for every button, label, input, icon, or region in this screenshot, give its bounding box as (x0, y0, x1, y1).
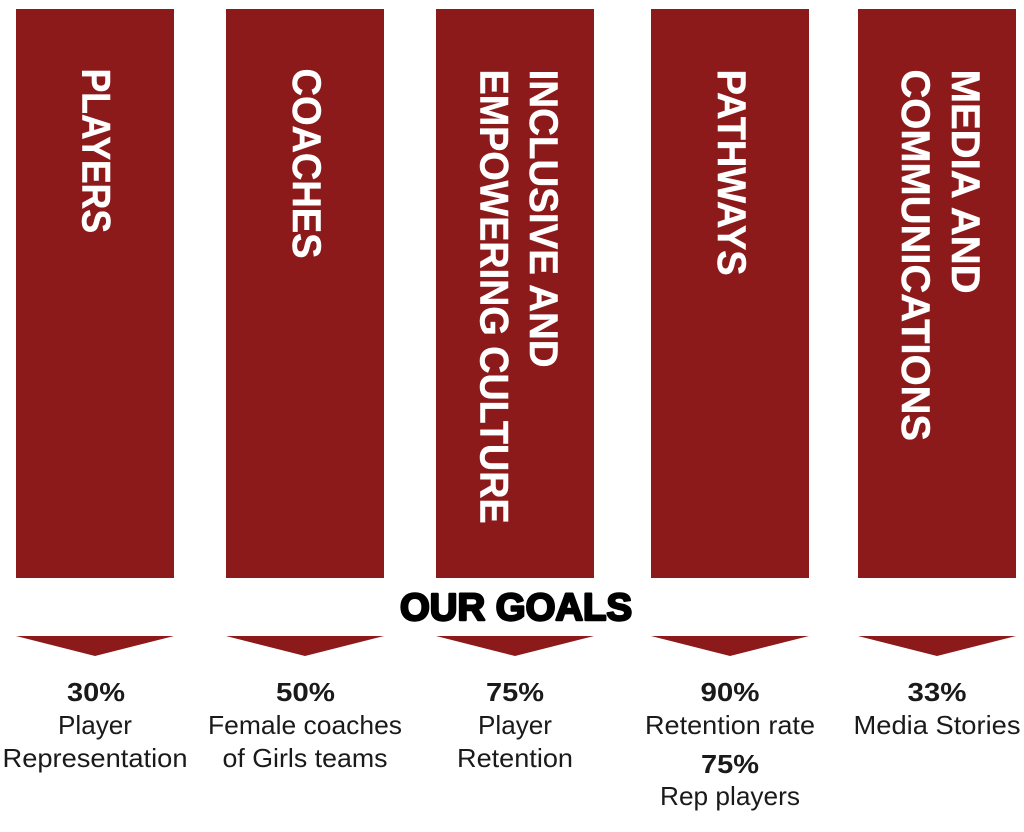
goal: media: 33% (908, 677, 966, 707)
goal: players (2, 677, 188, 773)
goal: pathways: Retention rate (645, 710, 815, 740)
goal: pathways (645, 677, 815, 811)
panel: pathways (651, 9, 809, 578)
goal: coaches: 50% (276, 677, 335, 707)
goal: media: Media Stories (854, 710, 1020, 740)
panel: media and communications: COMMUNICATIONS (893, 70, 937, 441)
panel: players: PLAYERS (74, 69, 118, 233)
arrow: players (16, 636, 174, 656)
arrow: pathways (651, 636, 809, 656)
goal: players: 30% (67, 677, 125, 707)
panel: media and communications (858, 9, 1016, 578)
panel: inclusive and empowering culture (436, 9, 594, 578)
goal: culture (457, 677, 573, 773)
panel: coaches: COACHES (284, 68, 328, 258)
panel: media and communications: MEDIA AND (943, 70, 987, 294)
heading: our goals: OUR GOALS (400, 587, 632, 629)
panel: pathways: PATHWAYS (709, 70, 753, 276)
goal: media (854, 677, 1020, 740)
goal: coaches: Female coaches (208, 710, 402, 740)
arrow: culture (436, 636, 594, 656)
goal: players: Representation (2, 743, 188, 773)
panel: inclusive and empowering culture: EMPOWERING CULTURE (472, 70, 516, 524)
goal: culture: Retention (457, 743, 573, 773)
panel: inclusive and empowering culture: INCLUSIVE AND (521, 70, 565, 368)
panel: coaches (226, 9, 384, 578)
arrow: media (858, 636, 1016, 656)
panel: players (16, 9, 174, 578)
goal: pathways: 90% (700, 677, 760, 707)
goal: players: Player (58, 710, 132, 740)
goal: pathways: Rep players (660, 781, 800, 811)
goal: culture: 75% (486, 677, 544, 707)
goal: culture: Player (478, 710, 552, 740)
goal: coaches (208, 677, 402, 773)
goal: pathways: 75% (701, 749, 759, 779)
arrow: coaches (226, 636, 384, 656)
goal: coaches: of Girls teams (222, 743, 388, 773)
